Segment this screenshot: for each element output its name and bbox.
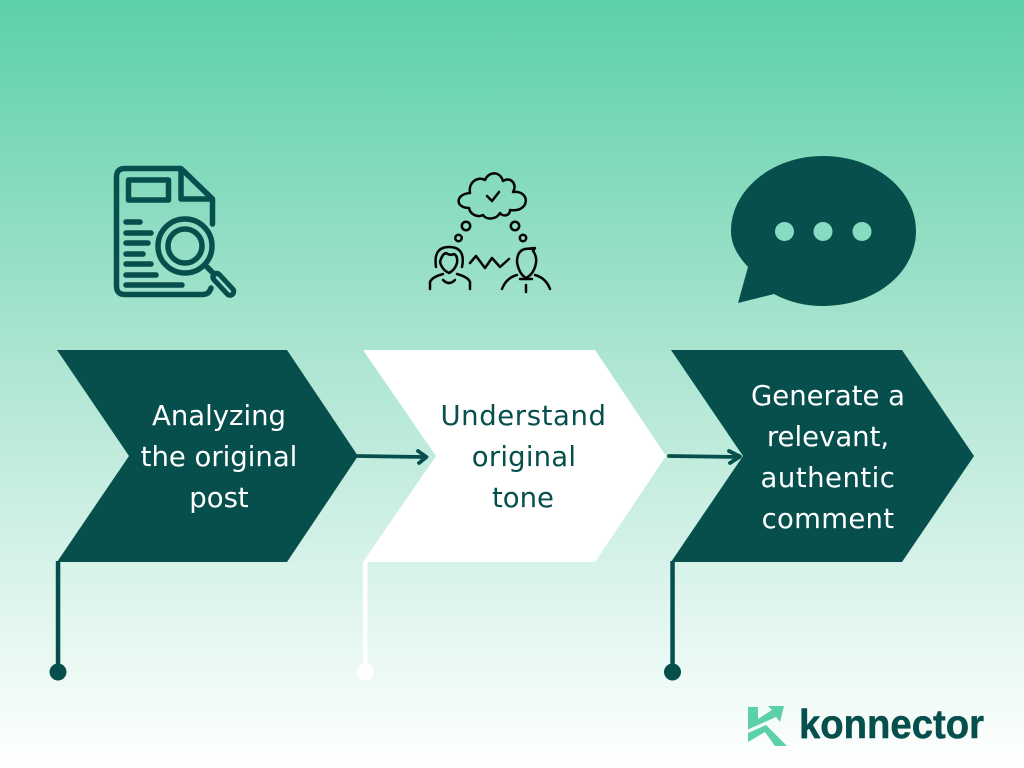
connector: step 1 pin: [50, 561, 66, 680]
chevron: step 2: [363, 350, 666, 562]
chevron: step 1: the original: [141, 441, 297, 473]
chevron: step 3: Generate a: [751, 380, 905, 412]
arrow: step 2 to step 3: [669, 451, 740, 463]
logo: konnector: konnector: [799, 701, 984, 747]
chevron: step 1: [57, 350, 358, 562]
chevron: step 1: Analyzing: [152, 400, 286, 432]
logo mark: [748, 706, 787, 746]
chevron: step 2: original: [472, 441, 576, 473]
icon: two people sharing a thought: [430, 173, 550, 292]
chevron: step 1: post: [189, 482, 249, 514]
chevron: step 3: authentic: [761, 462, 895, 494]
chevron: step 2: Understand: [440, 400, 607, 432]
chevron: step 3: comment: [762, 503, 894, 535]
chevron: step 3: relevant,: [767, 421, 889, 453]
connector: step 2 pin: [357, 561, 374, 680]
arrow: step 1 to step 2: [358, 451, 426, 463]
chevron: step 3: [671, 350, 974, 562]
icon: speech bubble: [731, 156, 916, 306]
icon: document with magnifying glass: [116, 168, 230, 294]
connector: step 3 pin: [664, 561, 681, 680]
chevron: step 2: tone: [492, 482, 554, 514]
